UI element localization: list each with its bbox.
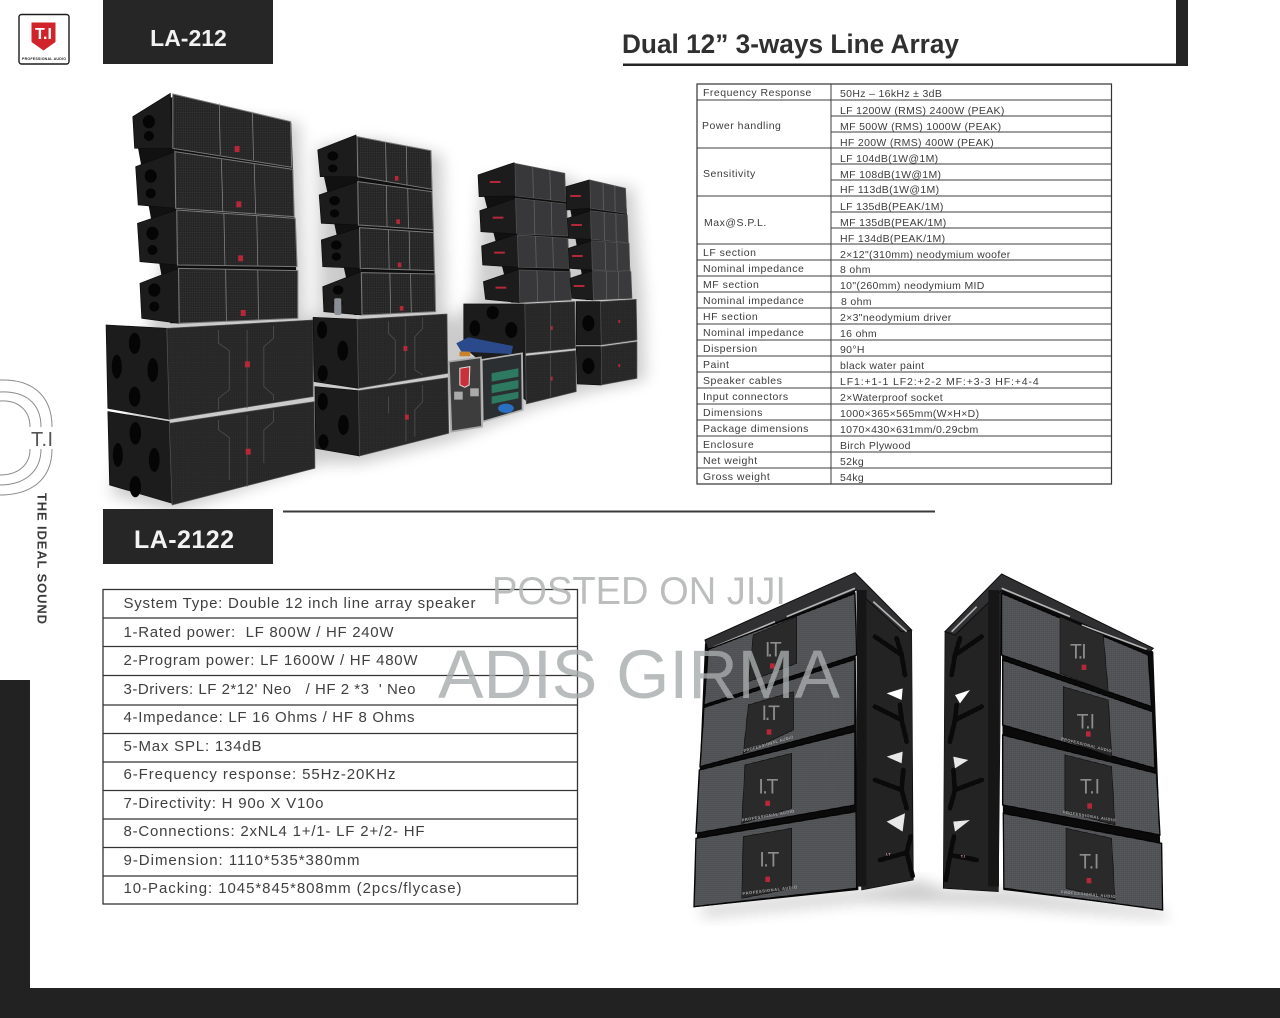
table row values: 2×12"(310mm) neodymium woofer bbox=[840, 249, 1011, 261]
table row values bbox=[840, 88, 1039, 484]
table row labels: Input connectors bbox=[703, 391, 789, 403]
subwoofer 5 bbox=[464, 304, 526, 400]
handles bbox=[875, 637, 905, 675]
soft shadow bbox=[700, 880, 1168, 918]
right array: T.I bbox=[1070, 641, 1087, 664]
LF/MF/HF specification table bbox=[697, 84, 1112, 484]
table row values: MF 500W (RMS) 1000W (PEAK) bbox=[840, 121, 1001, 133]
table row values: 10"(260mm) neodymium MID bbox=[840, 280, 985, 292]
emblem: T.I arcs: T.I bbox=[31, 429, 53, 451]
table row labels: Max@S.P.L. bbox=[704, 217, 767, 229]
right array: T.I bbox=[1080, 776, 1100, 799]
table row labels bbox=[702, 87, 812, 483]
LA-2122 specification list: 10-Packing: 1045*845*808mm (2pcs/flycase) bbox=[124, 880, 462, 897]
table row values: 2×3"neodymium driver bbox=[840, 312, 952, 324]
right array: T.I bbox=[1077, 711, 1095, 734]
table row values: black water paint bbox=[840, 360, 924, 372]
table row values: 2×Waterproof socket bbox=[840, 392, 943, 404]
table row labels: Net weight bbox=[703, 455, 758, 467]
table row labels: LF section bbox=[703, 247, 756, 259]
right array: PROFESSIONAL AUDIO bbox=[1062, 809, 1116, 823]
brand logo bbox=[19, 14, 69, 64]
table row values: LF 135dB(PEAK/1M) bbox=[840, 201, 944, 213]
title: Dual 12” 3-ways Line Array bbox=[622, 29, 959, 59]
LA-2122 specification list: 7-Directivity: H 90o X V10o bbox=[124, 795, 324, 812]
table row labels: Dimensions bbox=[703, 407, 763, 419]
left array: I.T bbox=[759, 849, 779, 872]
subwoofer 8 bbox=[576, 347, 601, 385]
product photo: LA-212 speaker stacks bbox=[106, 93, 645, 512]
left array: I.T bbox=[886, 851, 891, 856]
bottom dark band bbox=[0, 988, 1280, 1018]
table row labels: MF section bbox=[703, 279, 759, 291]
table row values: HF 200W (RMS) 400W (PEAK) bbox=[840, 137, 994, 149]
right array: PROFESSIONAL AUDIO bbox=[1061, 736, 1112, 753]
LA-2122 model badge bbox=[103, 509, 273, 564]
LA-2122 specification list: 2-Program power: LF 1600W / HF 480W bbox=[124, 652, 418, 669]
LA-2122 specification list: 5-Max SPL: 134dB bbox=[124, 738, 262, 755]
watermark: posted on: POSTED ON JIJI bbox=[492, 570, 786, 613]
table row values: LF1:+1-1 LF2:+2-2 MF:+3-3 HF:+4-4 bbox=[840, 376, 1039, 388]
LA-2122 specification list: 4-Impedance: LF 16 Ohms / HF 8 Ohms bbox=[124, 709, 414, 726]
table row labels: Speaker cables bbox=[703, 375, 782, 387]
table row values: Birch Plywood bbox=[840, 440, 911, 452]
subwoofer 3 bbox=[313, 317, 358, 388]
LA-2122 specification list: 1-Rated power: LF 800W / HF 240W bbox=[124, 624, 394, 641]
LA-2122 specification list: 8-Connections: 2xNL4 1+/1- LF 2+/2- HF bbox=[124, 823, 424, 840]
table row values: 1070×430×631mm/0.29cbm bbox=[840, 424, 979, 436]
right array bbox=[943, 574, 1163, 910]
stack 4 covered bbox=[566, 180, 637, 385]
table row labels: HF section bbox=[703, 311, 758, 323]
table row values: MF 108dB(1W@1M) bbox=[840, 169, 941, 181]
watermark: name: ADIS GIRMA bbox=[438, 636, 840, 713]
table row values: LF 1200W (RMS) 2400W (PEAK) bbox=[840, 105, 1005, 117]
table row values: 52kg bbox=[840, 456, 864, 468]
logo shield bbox=[32, 22, 56, 50]
section rule bbox=[283, 510, 935, 512]
LA-2122 specification list: 3-Drivers: LF 2*12' Neo / HF 2 *3 ' Neo bbox=[124, 681, 416, 698]
stack 2 bbox=[313, 135, 449, 456]
handles bbox=[952, 637, 982, 675]
stack 3 covered bbox=[464, 163, 576, 404]
product photo: LA-2122 speaker pair bbox=[694, 573, 1168, 918]
table row values: HF 134dB(PEAK/1M) bbox=[840, 233, 945, 245]
LA-2122 specification list bbox=[103, 590, 578, 904]
left array bbox=[694, 573, 913, 907]
subwoofer 4 bbox=[315, 387, 360, 456]
left array: I.T bbox=[765, 639, 782, 662]
right array: T.I bbox=[961, 853, 965, 858]
left array: I.T bbox=[762, 702, 780, 725]
subwoofer 1 bbox=[106, 325, 169, 419]
table row labels: Power handling bbox=[702, 120, 781, 132]
table row labels: Gross weight bbox=[703, 471, 770, 483]
table row values: 8 ohm bbox=[840, 264, 871, 276]
left array: PROFESSIONAL AUDIO bbox=[742, 884, 797, 896]
table row labels: Frequency Response bbox=[703, 87, 812, 99]
soft shadow bbox=[111, 113, 645, 512]
subwoofer 6 bbox=[526, 351, 576, 404]
table row labels: Nominal impedance bbox=[703, 263, 804, 275]
mixer and equipment racks bbox=[449, 337, 523, 432]
table row values: 50Hz – 16kHz ± 3dB bbox=[840, 88, 942, 100]
LA-2122 specification list: System Type: Double 12 inch line array speaker bbox=[124, 595, 476, 612]
bottle bbox=[334, 298, 341, 315]
table row values: 1000×365×565mm(W×H×D) bbox=[840, 408, 979, 420]
table row labels: Nominal impedance bbox=[703, 295, 804, 307]
left array: PROFESSIONAL AUDIO bbox=[741, 808, 795, 823]
subwoofer 2 bbox=[108, 412, 172, 503]
emblem: T.I arcs bbox=[0, 380, 53, 495]
table row values: 90°H bbox=[840, 344, 865, 356]
left dark side bar bbox=[0, 680, 30, 1018]
right array: T.I bbox=[1079, 851, 1099, 874]
stack 1 bbox=[106, 93, 315, 505]
LA-2122 specification list: 9-Dimension: 1110*535*380mm bbox=[124, 852, 360, 869]
left array: PROFESSIONAL AUDIO bbox=[743, 734, 794, 753]
logo caption: PROFESSIONAL AUDIO bbox=[22, 57, 66, 61]
top right heading frame bbox=[623, 0, 1188, 66]
LA-212 model badge: LA-212 bbox=[150, 25, 227, 51]
table row labels: Enclosure bbox=[703, 439, 754, 451]
table row values: LF 104dB(1W@1M) bbox=[840, 153, 938, 165]
table row values: HF 113dB(1W@1M) bbox=[840, 184, 939, 196]
left array: I.T bbox=[758, 776, 778, 799]
table row values: 54kg bbox=[840, 472, 864, 484]
logo initials: T.I bbox=[35, 26, 52, 43]
table row values: MF 135dB(PEAK/1M) bbox=[840, 217, 947, 229]
table row labels: Dispersion bbox=[703, 343, 758, 355]
right array: PROFESSIONAL AUDIO bbox=[1061, 889, 1116, 899]
LA-2122 model badge: LA-2122 bbox=[134, 526, 234, 554]
vertical tagline: THE IDEAL SOUND bbox=[34, 493, 50, 624]
LA-2122 specification list: 6-Frequency response: 55Hz-20KHz bbox=[124, 766, 396, 783]
table row labels: Package dimensions bbox=[703, 423, 809, 435]
LA-212 model badge bbox=[103, 0, 273, 64]
table row values: 16 ohm bbox=[840, 328, 877, 340]
table row values: 8 ohm bbox=[841, 296, 872, 308]
table row labels: Paint bbox=[703, 359, 729, 371]
table row labels: Sensitivity bbox=[703, 168, 756, 180]
table row labels: Nominal impedance bbox=[703, 327, 804, 339]
subwoofer 7 bbox=[576, 302, 601, 345]
